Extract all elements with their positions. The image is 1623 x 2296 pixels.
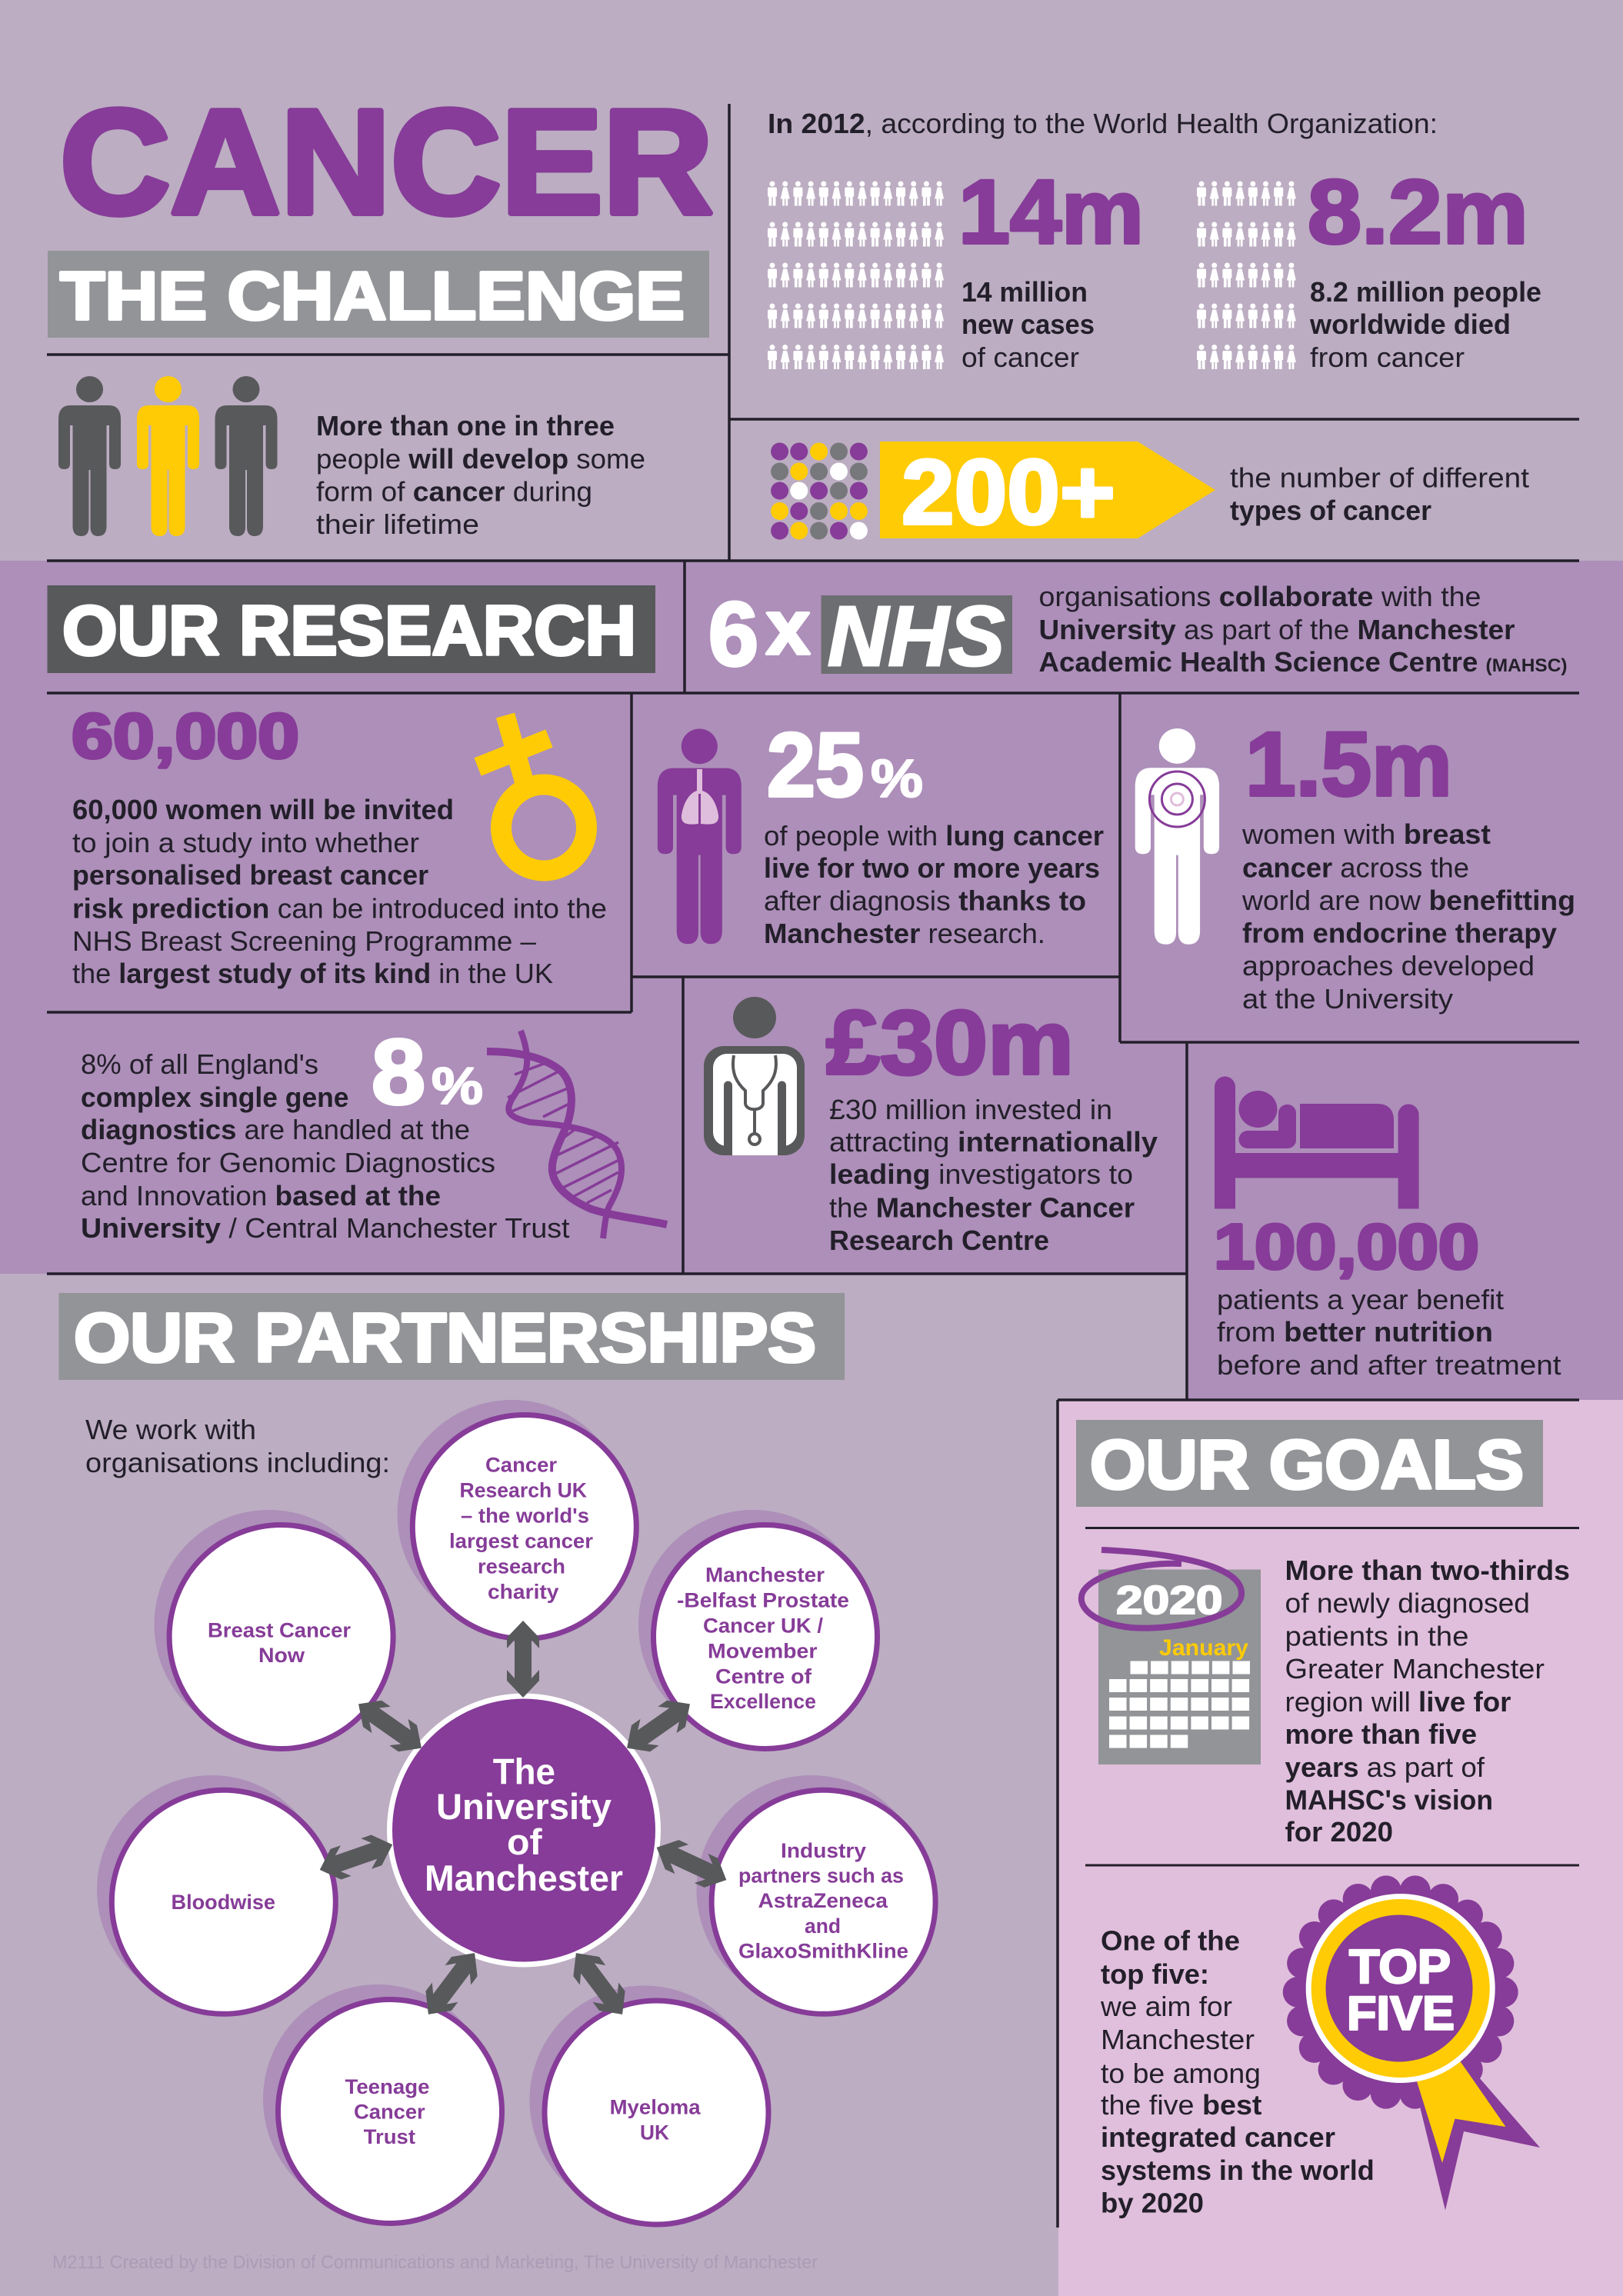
text: 60,000 women: NHS Breast Screening Programme – [72, 925, 536, 957]
stat: 6x NHS: x [766, 585, 810, 671]
text: £30 million: leading investigators to [829, 1158, 1133, 1190]
stat: 6x NHS: NHS [828, 589, 1005, 684]
partner: Industry: partners such as [738, 1864, 904, 1888]
icon: 2020 calendar [1081, 1550, 1261, 1764]
partner: Manchester-Belfast Prostate Cancer UK: -Belfast Prostate [677, 1589, 849, 1612]
text: £30 million [829, 1094, 1158, 1256]
text: NHS collaboration: Academic Health Science Centre (MAHSC) [1038, 646, 1568, 678]
arrows: two-way links [315, 1621, 733, 2024]
text: two-thirds goal: More than two-thirds [1285, 1555, 1570, 1586]
icon: person with target on chest [1135, 728, 1219, 945]
hub: The University of Manchester: of [507, 1821, 542, 1862]
icon: coloured dot grid [771, 443, 868, 540]
hub: The University of Manchester: The [493, 1751, 555, 1792]
stat: 8.2m: 8.2m [1308, 162, 1528, 263]
diagram: partnership hub [97, 1400, 935, 2224]
partner: Manchester-Belfast Prostate Cancer UK: Excellence [710, 1690, 816, 1713]
text: better nutrition: patients a year benefit [1217, 1284, 1504, 1315]
text: 8% diagnostics: 8% of all England's [81, 1048, 318, 1080]
partner: Cancer Research UK [397, 1400, 636, 1638]
partner: Cancer Research UK: largest cancer [449, 1529, 594, 1552]
text: breast cancer therapy: approaches developed [1242, 950, 1535, 981]
partner: Industry: and [805, 1914, 841, 1938]
partner: Cancer Research UK: charity [488, 1580, 558, 1603]
text: 8% diagnostics: and Innovation based at the [81, 1180, 441, 1211]
stat: 100,000: 100,000 [1214, 1211, 1479, 1282]
partner: Myeloma UK [529, 1986, 768, 2224]
text: WHO intro: In 2012, according to the World Health Organization: [768, 108, 1438, 139]
text: £30 million: Research Centre [829, 1225, 1049, 1256]
stat: 8.2m: worldwide died [1309, 308, 1511, 340]
text: breast cancer therapy: world are now benefitting [1241, 885, 1575, 916]
partner: Cancer Research UK: Research UK [460, 1478, 587, 1501]
text: one in three: people will develop some [316, 443, 645, 475]
stat: 14m: 14 million [961, 276, 1088, 308]
icon: person with lungs [658, 729, 742, 944]
text: two-thirds goal: years as part of [1285, 1751, 1485, 1783]
stat: 14m: of cancer [961, 342, 1079, 373]
partner: Industry: GlaxoSmithKline [738, 1940, 908, 1963]
icon: 8.2 million people pictogram [1197, 182, 1296, 369]
text: NHS collaboration [1038, 581, 1568, 678]
partner: Teenage Cancer Trust: Trust [364, 2125, 415, 2148]
text: lung cancer: after diagnosis thanks to [764, 885, 1086, 917]
text: one in three: their lifetime [316, 508, 479, 540]
stat: 8% [372, 1021, 483, 1124]
icon: DNA helix [487, 1031, 667, 1238]
stat: 14m: 14m [958, 162, 1144, 263]
arrow: 200+: 200+ [901, 441, 1115, 544]
partner: Breast Cancer Now: Breast Cancer [208, 1618, 352, 1641]
text: top five goal: One of the [1101, 1924, 1240, 1957]
text: 60,000 women: the largest study of its kind in the UK [72, 958, 553, 989]
text: top five goal: the five best [1101, 2089, 1262, 2121]
stat: 1.5m: 1.5m [1245, 714, 1452, 815]
text: types of cancer: the number of different [1230, 462, 1529, 494]
panel: research background [0, 561, 1623, 1400]
heading: the challenge: THE CHALLENGE [60, 258, 685, 334]
icon: three people, one highlighted [58, 376, 277, 536]
title: CANCER: CANCER [60, 78, 713, 245]
text: one in three: More than one in three [316, 410, 615, 442]
text: breast cancer therapy [1241, 818, 1575, 1015]
partner: Teenage Cancer Trust: Cancer [354, 2100, 425, 2123]
text: top five goal: by 2020 [1101, 2188, 1204, 2218]
text: two-thirds goal [1285, 1555, 1570, 1848]
stat: 6x NHS: 6 [708, 584, 758, 685]
partner: Industry: Industry [781, 1839, 866, 1862]
text: 60,000 women: risk prediction can be introduced into the [72, 892, 607, 925]
hub: The University of Manchester: Manchester [425, 1858, 623, 1898]
text: 8% diagnostics [81, 1048, 569, 1244]
text: one in three: form of cancer during [316, 475, 592, 508]
text: types of cancer: types of cancer [1230, 495, 1431, 526]
text: 8% diagnostics: complex single gene [81, 1081, 349, 1113]
stat: 8.2m [1308, 162, 1541, 373]
text: two-thirds goal: patients in the [1285, 1620, 1469, 1652]
text: types of cancer [1230, 462, 1529, 526]
partner: Breast Cancer Now [154, 1510, 393, 1749]
text: we work with: organisations including: [85, 1447, 390, 1478]
text: two-thirds goal: more than five [1285, 1718, 1477, 1750]
stat: 8.2m: from cancer [1310, 342, 1465, 373]
partner: Manchester-Belfast Prostate Cancer UK: Movember [708, 1640, 818, 1663]
text: top five goal: top five: [1101, 1958, 1209, 1990]
text: 60,000 women: personalised breast cancer [72, 859, 428, 891]
text: lung cancer: live for two or more years [764, 852, 1100, 884]
icon: top five rosette [1297, 1888, 1540, 2211]
text: 8% diagnostics: Centre for Genomic Diagnostics [81, 1147, 495, 1178]
heading: our research: OUR RESEARCH [62, 592, 636, 670]
heading: our partnerships: OUR PARTNERSHIPS [74, 1300, 816, 1377]
icon: 14 million people pictogram [768, 182, 944, 369]
text: breast cancer therapy: cancer across the [1242, 852, 1469, 883]
text: £30 million: attracting internationally [829, 1126, 1158, 1158]
text: top five goal: to be among [1101, 2058, 1261, 2089]
partner: Industry: AstraZeneca [758, 1889, 888, 1912]
text: £30 million: the Manchester Cancer [829, 1192, 1135, 1223]
partner: Manchester-Belfast Prostate Cancer UK [638, 1510, 877, 1749]
partner: Bloodwise [97, 1775, 335, 2014]
icon: top five rosette: FIVE [1347, 1988, 1455, 2040]
partner: Manchester-Belfast Prostate Cancer UK: Manchester [705, 1563, 825, 1586]
text: lung cancer: of people with lung cancer [764, 820, 1104, 851]
text: breast cancer therapy: from endocrine therapy [1242, 917, 1557, 949]
stat: 25% [767, 715, 923, 816]
text: NHS collaboration: University as part of the Manchester [1038, 614, 1515, 645]
icon: 2020 calendar: 2020 [1116, 1578, 1223, 1623]
text: 8% diagnostics: diagnostics are handled at the [81, 1114, 470, 1145]
stat: 14m [958, 162, 1144, 373]
stat: 25%: 25 [767, 715, 864, 816]
partner: Teenage Cancer Trust [263, 1984, 502, 2223]
stat: 14m: new cases [961, 308, 1095, 340]
footer credit: M2111 Created by the Division of Communications and Marketing, The University of Manchester [52, 2252, 818, 2273]
hub: The University of Manchester [387, 1694, 661, 1968]
text: one in three [316, 410, 645, 540]
stat: 6x NHS [708, 584, 1012, 685]
text: 60,000 women [72, 794, 607, 989]
text: two-thirds goal: of newly diagnosed [1285, 1588, 1530, 1618]
text: £30 million: £30 million invested in [829, 1094, 1112, 1125]
icon: 2020 calendar: January [1159, 1635, 1248, 1661]
partner: Bloodwise: Bloodwise [171, 1891, 275, 1914]
stat: 25%: % [871, 748, 923, 808]
partner: Cancer Research UK: research [478, 1555, 565, 1578]
text: top five goal: systems in the world [1101, 2154, 1375, 2186]
partner: Myeloma UK: UK [640, 2121, 669, 2144]
hub: The University of Manchester: University [436, 1786, 612, 1827]
text: 60,000 women: to join a study into whether [72, 827, 419, 858]
text: two-thirds goal: region will live for [1285, 1686, 1511, 1718]
text: top five goal: integrated cancer [1101, 2121, 1335, 2153]
text: two-thirds goal: Greater Manchester [1285, 1653, 1545, 1685]
stat: £30m: £30m [826, 992, 1074, 1094]
text: we work with: We work with [85, 1414, 256, 1445]
partner: Manchester-Belfast Prostate Cancer UK: Cancer UK / [703, 1614, 823, 1637]
icon: top five rosette: TOP [1349, 1941, 1451, 1994]
text: 8% diagnostics: University / Central Manchester Trust [81, 1212, 569, 1244]
panel: goals background [1058, 1400, 1623, 2296]
stat: 8%: % [432, 1057, 483, 1115]
partner: Cancer Research UK: Cancer [485, 1454, 558, 1477]
text: better nutrition: before and after treatment [1217, 1349, 1561, 1381]
icon: patient in bed [1215, 1077, 1419, 1209]
text: lung cancer [764, 820, 1104, 949]
partner: Breast Cancer Now: Now [258, 1644, 305, 1667]
text: breast cancer therapy: at the University [1242, 983, 1453, 1015]
text: lung cancer: Manchester research. [764, 918, 1045, 949]
partner: Cancer Research UK: – the world's [461, 1505, 589, 1528]
text: top five goal: Manchester [1101, 2024, 1255, 2055]
text: better nutrition: from better nutrition [1217, 1316, 1493, 1348]
text: 60,000 women: 60,000 women will be invited [72, 794, 454, 825]
partner: Industry [697, 1775, 935, 2014]
text: two-thirds goal: for 2020 [1285, 1816, 1393, 1848]
stat: 60,000: 60,000 [72, 700, 299, 771]
stat: 8.2m: 8.2 million people [1310, 276, 1541, 308]
text: NHS collaboration: organisations collaborate with the [1038, 581, 1481, 612]
partner: Manchester-Belfast Prostate Cancer UK: Centre of [715, 1665, 812, 1688]
stat: 8%: 8 [372, 1021, 425, 1124]
arrow: 200+ [880, 441, 1215, 544]
partner: Teenage Cancer Trust: Teenage [345, 2075, 429, 2098]
partner: Myeloma UK: Myeloma [610, 2095, 702, 2118]
text: top five goal [1100, 1924, 1375, 2218]
text: better nutrition [1217, 1284, 1561, 1381]
icon: doctor with stethoscope [704, 997, 805, 1155]
icon: female symbol [478, 715, 586, 871]
text: breast cancer therapy: women with breast [1241, 818, 1491, 850]
text: top five goal: we aim for [1100, 1991, 1232, 2022]
text: we work with [85, 1414, 390, 1478]
text: two-thirds goal: MAHSC's vision [1285, 1784, 1493, 1815]
heading: our goals: OUR GOALS [1090, 1427, 1524, 1504]
